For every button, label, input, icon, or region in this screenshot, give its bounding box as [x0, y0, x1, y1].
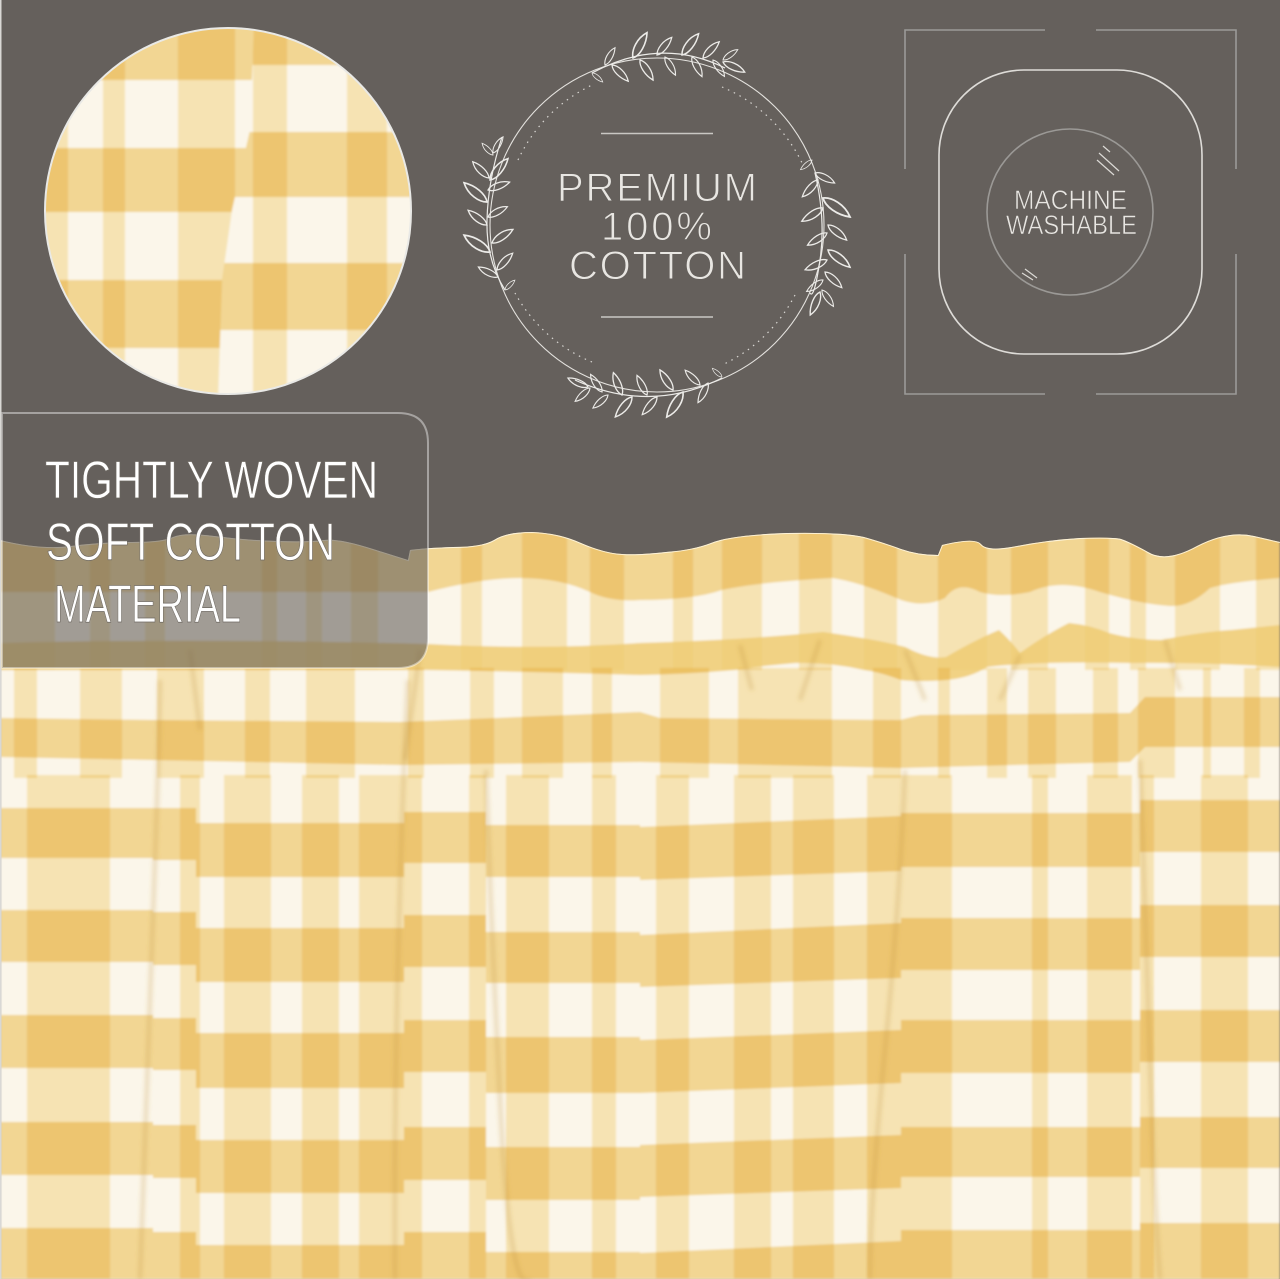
wreath text	[557, 166, 757, 288]
wreath left branch	[461, 135, 516, 291]
badge: premium 100% cotton wreath	[461, 31, 853, 420]
callout text: SOFT COTTON	[46, 513, 335, 572]
wreath right branch	[799, 158, 853, 316]
callout translucent box	[2, 413, 428, 668]
gingham curtain	[0, 520, 1280, 1279]
lower panel C	[404, 775, 486, 1279]
wreath text: COTTON	[569, 244, 746, 288]
curtain heading: top ruffle	[0, 525, 1280, 670]
curtain rod pocket band	[0, 623, 1280, 681]
lower panel A	[0, 775, 153, 1279]
wreath rules	[601, 134, 713, 317]
wreath bottom branch	[567, 367, 723, 420]
washable text: WASHABLE	[1006, 210, 1137, 240]
washable text: MACHINE	[1014, 185, 1127, 215]
wreath ring	[490, 58, 824, 392]
wreath dotted arcs	[515, 85, 803, 365]
callout text: MATERIAL	[54, 575, 241, 634]
outer corner frame	[905, 30, 1236, 394]
lower panel D	[486, 775, 640, 1279]
lower panel E	[640, 775, 901, 1279]
badge: machine washable	[905, 30, 1236, 394]
inner circle	[987, 129, 1153, 295]
washable text	[1006, 185, 1137, 240]
callout text: TIGHTLY WOVEN	[45, 451, 378, 510]
panel: fabric close-up circle	[40, 25, 418, 400]
wreath text: PREMIUM	[557, 166, 757, 210]
lower panel G	[1140, 775, 1280, 1279]
hatch marks	[1022, 146, 1119, 280]
curtain light edge	[0, 532, 1280, 560]
panel: tightly woven callout	[2, 413, 428, 668]
wreath top branch	[591, 31, 746, 83]
fabric fold shadows	[140, 640, 1180, 1279]
pleated middle band	[0, 668, 1280, 778]
lower panel B	[153, 775, 404, 1279]
lower panel F	[901, 775, 1140, 1279]
wreath text: 100%	[601, 205, 712, 249]
rounded square	[939, 70, 1202, 354]
callout text	[45, 451, 378, 634]
